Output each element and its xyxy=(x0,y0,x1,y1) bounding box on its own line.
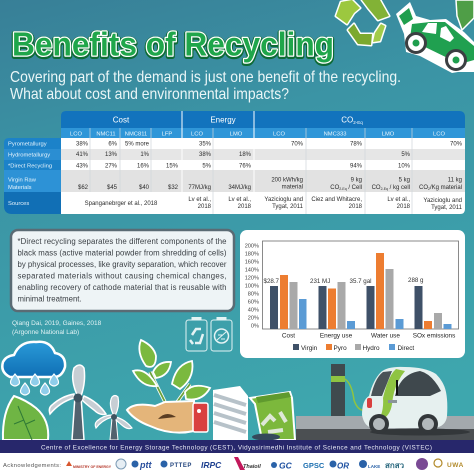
logo: lake mark xyxy=(359,460,380,469)
sub header labels xyxy=(70,132,445,138)
logo: pttep xyxy=(160,460,192,469)
category labels: Energy use xyxy=(320,332,353,340)
header labels: CO xyxy=(341,116,353,124)
table values: 38% xyxy=(199,152,212,158)
category labels: SOx emissions xyxy=(413,332,455,340)
y axis labels: 0% xyxy=(251,324,259,330)
table xyxy=(4,111,465,214)
sub header labels: LCO xyxy=(273,132,285,138)
panel: direct recycling note xyxy=(11,230,234,311)
y axis labels xyxy=(245,244,259,330)
sources values: Ciez and Whitacre, xyxy=(311,197,362,203)
table values: / kg cell xyxy=(388,185,410,191)
table values: 9 kg xyxy=(351,178,362,184)
table body rows xyxy=(61,138,465,214)
y axis labels: 100% xyxy=(245,284,259,290)
table values: 34MJ/kg xyxy=(228,185,251,191)
icon: no-emission battery xyxy=(211,318,232,351)
icon: recycle symbol xyxy=(336,0,389,45)
table values: $45 xyxy=(107,185,118,191)
table values: 38% xyxy=(76,142,89,148)
row labels: Virgin Raw xyxy=(8,178,37,184)
y axis labels: 60% xyxy=(248,300,259,306)
subtitle xyxy=(10,69,401,103)
y axis labels: 160% xyxy=(245,260,259,266)
category labels xyxy=(282,332,455,340)
sources values: Lv et al., xyxy=(228,197,251,203)
bar value labels: $28.7 xyxy=(264,278,280,285)
sub header labels: LFP xyxy=(162,132,172,138)
sources values: 2018 xyxy=(198,204,212,210)
table values: 41% xyxy=(76,152,89,158)
y axis labels: 140% xyxy=(245,268,259,274)
legend: Direct xyxy=(398,345,414,352)
acknowledgements strip xyxy=(0,453,474,474)
table values: 5% xyxy=(401,152,411,158)
logo: gpsc: GPSC xyxy=(303,461,325,470)
icon: recycle battery xyxy=(186,318,207,351)
table values: /Kg material xyxy=(430,185,462,191)
header labels: 2-Eq xyxy=(353,120,363,125)
logo: lake mark: LAKE xyxy=(368,464,380,469)
category labels: Cost xyxy=(282,332,295,340)
sources values: Yazicioglu and xyxy=(423,198,462,204)
icon: charging station xyxy=(331,364,366,416)
sub header labels: NMC811 xyxy=(125,132,147,138)
sources values: 2018 xyxy=(238,204,252,210)
table values: 15% xyxy=(166,164,179,170)
table values: 27% xyxy=(105,164,118,170)
subtitle: What about cost and environmental impacts? xyxy=(10,86,289,103)
note text: black mass (active material powder from shredding of cells) xyxy=(18,248,227,258)
bars: direct xyxy=(299,299,452,329)
bar value labels: 231 MJ xyxy=(310,278,330,285)
logo: ptt: ptt xyxy=(139,460,152,470)
table values: CO xyxy=(330,185,339,191)
icon: green electric car xyxy=(396,2,474,73)
table values: $40 xyxy=(139,185,150,191)
table values: 2 xyxy=(428,187,430,191)
row labels: Materials xyxy=(8,185,32,191)
logo: thaioil: Thaioil xyxy=(243,464,261,470)
row labels: Hydrometallurgy xyxy=(8,152,50,158)
sub header labels: NMC11 xyxy=(96,132,116,138)
title inner outline: Benefits of Recycling xyxy=(12,26,334,62)
table values: 5 kg xyxy=(399,178,410,184)
logo: ministry of energy: MINISTRY OF ENERGY xyxy=(73,465,112,469)
note text: by physical processes, like gravity separation, which recover xyxy=(18,260,227,269)
category labels: Water use xyxy=(371,332,400,340)
icon: leaf top right xyxy=(456,0,474,30)
logo: thai agency mark: สกสว xyxy=(385,461,405,470)
row labels: *Direct Recycling xyxy=(8,164,52,170)
table values: / Cell xyxy=(347,185,362,191)
table values: 43% xyxy=(76,164,89,170)
logo: or xyxy=(330,460,349,470)
sub header labels: LCO xyxy=(191,132,203,138)
table values: CO xyxy=(419,185,428,191)
footer text: Centre of Excellence for Energy Storage Technology (CEST), Vidyasirimedhi Institute of Science and Technology (VISTEC) xyxy=(41,444,432,452)
note text xyxy=(18,237,227,304)
note text: enabling recovery of cathode material that is reusable with xyxy=(18,283,226,292)
table values: 10% xyxy=(398,164,411,170)
header labels xyxy=(113,116,363,125)
sources values: Tygat, 2011 xyxy=(431,205,463,211)
sub header band xyxy=(61,128,465,138)
subtitle: Covering part of the demand is just one benefit of the recycling. xyxy=(10,69,401,86)
bar value labels: 288 g xyxy=(408,277,424,284)
icon: hand holding plant xyxy=(127,340,210,433)
header labels: Cost xyxy=(113,116,130,124)
bar value labels: 35.7 gal xyxy=(350,278,372,285)
panel: bar chart xyxy=(240,230,465,358)
table header band xyxy=(61,111,465,128)
y axis labels: 120% xyxy=(245,276,259,282)
sources values: Tygat, 2011 xyxy=(272,204,304,210)
legend: Hydro xyxy=(362,345,380,352)
logo: gc: GC xyxy=(279,460,293,470)
sources values: Yazicioglu and xyxy=(264,197,303,203)
legend: Pyro xyxy=(334,345,347,352)
table values: 1% xyxy=(140,152,150,158)
table values: 77MJ/kg xyxy=(188,185,211,191)
sub header labels: LMO xyxy=(382,132,395,138)
acknowledgements label: Acknowledgements: xyxy=(3,463,61,469)
row label column xyxy=(4,138,61,214)
sources values: Lv et al., xyxy=(387,197,410,203)
icon: rain cloud xyxy=(2,342,65,395)
row labels: Sources xyxy=(8,201,29,207)
legend xyxy=(293,344,414,352)
road xyxy=(296,416,474,440)
logo: uwa: UWA xyxy=(447,462,464,469)
row labels xyxy=(8,142,52,207)
bar value labels xyxy=(264,277,424,285)
table values: 18% xyxy=(239,152,252,158)
table values: CO xyxy=(372,185,381,191)
row labels: Pyrometallurgy xyxy=(8,142,47,148)
y axis labels: 20% xyxy=(248,316,259,322)
bars: pyro xyxy=(280,253,432,329)
table values: 35% xyxy=(199,142,212,148)
bars: hydro xyxy=(290,269,442,329)
logo: purple seal xyxy=(416,458,428,470)
logo: gc xyxy=(271,460,293,470)
sub header labels: NMC333 xyxy=(324,132,346,138)
note text: minimal treatment. xyxy=(18,294,82,304)
table values: $62 xyxy=(78,185,89,191)
logo: or: OR xyxy=(337,462,349,470)
table values: 76% xyxy=(239,164,252,170)
logo: irpc: IRPC xyxy=(201,460,222,470)
logo: pttep: PTTEP xyxy=(170,463,192,469)
table values xyxy=(76,142,463,191)
table values: 5% more xyxy=(125,142,150,148)
citation: Qiang Dai, 2019, Gaines, 2018 xyxy=(12,320,102,327)
sources values xyxy=(85,197,463,211)
logo: ministry of energy xyxy=(66,461,112,469)
icon: large wind turbine xyxy=(49,365,106,440)
logo: thaioil xyxy=(234,457,261,470)
icon: leaf xyxy=(3,396,48,440)
y axis labels: 180% xyxy=(245,252,259,258)
sub header labels: LMO xyxy=(230,132,243,138)
sources values: Spanganebrger et al., 2018 xyxy=(85,201,158,207)
y axis labels: 40% xyxy=(248,308,259,314)
icon: recycling bin xyxy=(250,392,295,440)
table values: 5% xyxy=(202,164,212,170)
icon: electric car xyxy=(362,367,470,436)
note text: separated materials without causing chemical changes, xyxy=(18,272,226,280)
table values: 70% xyxy=(291,142,304,148)
logo: ptt xyxy=(132,460,152,470)
y axis labels: 200% xyxy=(245,244,259,250)
header labels: Energy xyxy=(210,116,236,124)
logo: seal xyxy=(116,459,126,469)
sub header labels: LCO xyxy=(433,132,445,138)
table values: 2-Eq xyxy=(381,187,388,191)
table values: $32 xyxy=(168,185,179,191)
logo: uwa xyxy=(434,459,464,469)
table values: 200 kWh/kg xyxy=(271,178,303,184)
citation xyxy=(12,320,102,336)
citation: (Argonne National Lab) xyxy=(12,329,79,336)
icon: small wind turbine xyxy=(95,396,132,440)
note text: *Direct recycling separates the different components of the xyxy=(18,237,226,246)
sources values: 2018 xyxy=(397,204,411,210)
legend: Virgin xyxy=(301,345,318,352)
table values: material xyxy=(282,184,303,190)
sources values: Lv et al., xyxy=(188,197,211,203)
y axis labels: 80% xyxy=(248,292,259,298)
footer band xyxy=(0,440,474,453)
plot frame xyxy=(262,241,458,329)
title: Benefits of Recycling xyxy=(12,26,334,64)
table values: 2-Eq xyxy=(339,187,347,191)
table values: 13% xyxy=(105,152,118,158)
bars: virgin xyxy=(270,286,422,329)
table values: 16% xyxy=(137,164,150,170)
table values: 70% xyxy=(450,142,463,148)
table values: 94% xyxy=(350,164,363,170)
table values: 78% xyxy=(350,142,363,148)
table values: 6% xyxy=(108,142,118,148)
sources values: 2018 xyxy=(349,204,363,210)
table values: 11 kg xyxy=(448,178,462,184)
icon: paper stack xyxy=(213,386,248,440)
sub header labels: LCO xyxy=(70,132,82,138)
